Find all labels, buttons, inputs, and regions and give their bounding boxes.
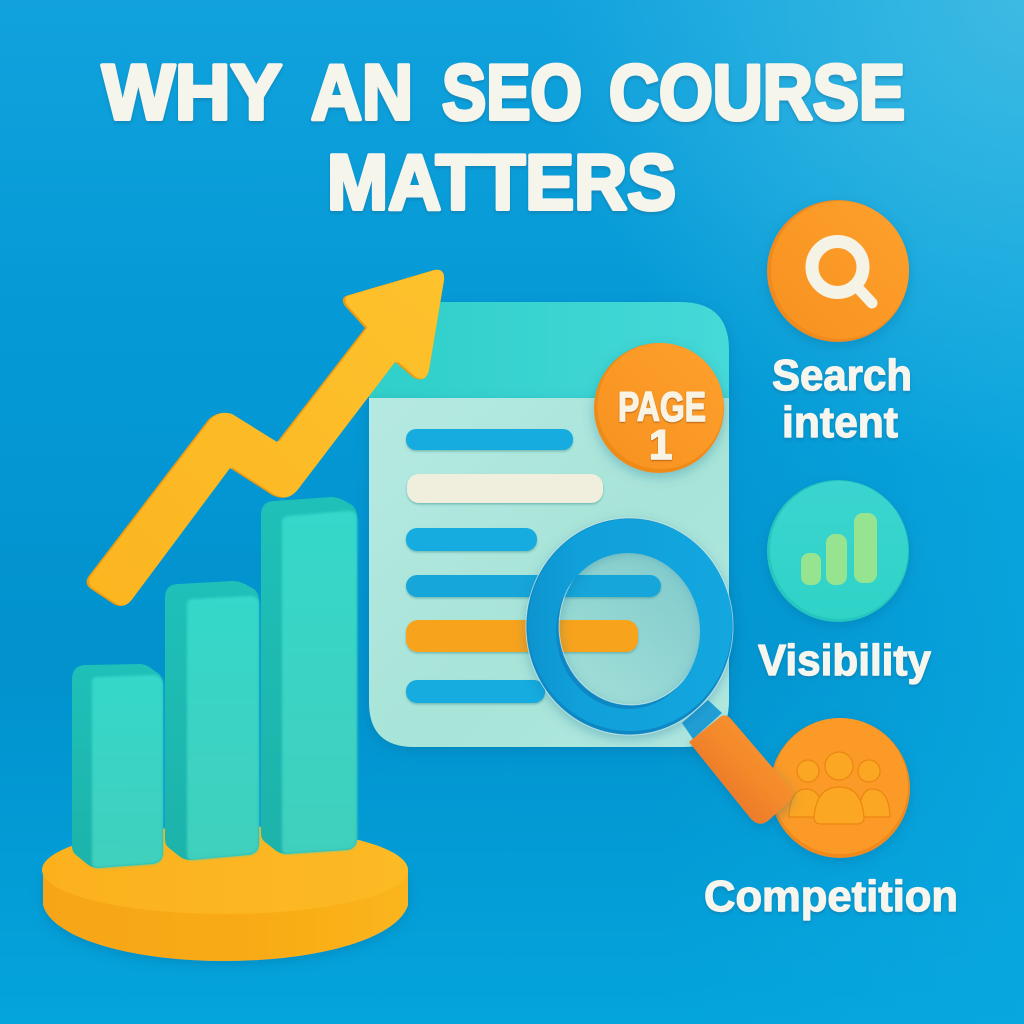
result line 3 — [406, 528, 537, 551]
badge text — [618, 383, 706, 468]
label: competition: Competition — [704, 872, 958, 921]
icon: signal bars — [801, 513, 877, 585]
title: SEO — [442, 48, 582, 136]
result line 4 — [406, 575, 661, 597]
label: search intent: Search — [772, 351, 912, 400]
handle — [689, 715, 792, 824]
bar chart — [72, 497, 357, 868]
bar 2 — [165, 581, 259, 860]
icon: competition disc — [770, 718, 910, 858]
magnifier lens tint — [556, 546, 706, 708]
panel sheet — [369, 398, 729, 747]
panel header — [369, 302, 729, 399]
result line 1 — [406, 429, 573, 450]
bar 3 — [261, 497, 357, 854]
result line 6 — [406, 680, 545, 703]
badge text: PAGE — [618, 383, 706, 430]
arrow — [87, 269, 447, 606]
title: MATTERS — [327, 138, 676, 226]
badge text: 1 — [649, 421, 672, 468]
panel: search results page — [369, 302, 729, 747]
title: WHY — [102, 48, 282, 136]
label: search intent — [772, 351, 912, 447]
label: search intent: intent — [782, 398, 898, 447]
badge: page 1 — [594, 343, 724, 473]
title: COURSE — [609, 48, 905, 136]
label: visibility: Visibility — [758, 636, 931, 685]
title: AN — [311, 48, 413, 136]
magnifying glass — [526, 518, 792, 824]
icon: visibility disc — [767, 480, 909, 622]
bar 1 — [72, 664, 163, 868]
ring — [526, 518, 733, 735]
handle connector — [682, 700, 722, 739]
icon: people group — [789, 752, 890, 824]
title — [102, 48, 905, 226]
result line 5 orange — [406, 620, 638, 652]
platform — [42, 826, 408, 961]
icon: search intent disc — [767, 200, 909, 342]
icon: small magnifier — [812, 242, 872, 303]
result line 2 highlighted cream — [407, 474, 603, 503]
